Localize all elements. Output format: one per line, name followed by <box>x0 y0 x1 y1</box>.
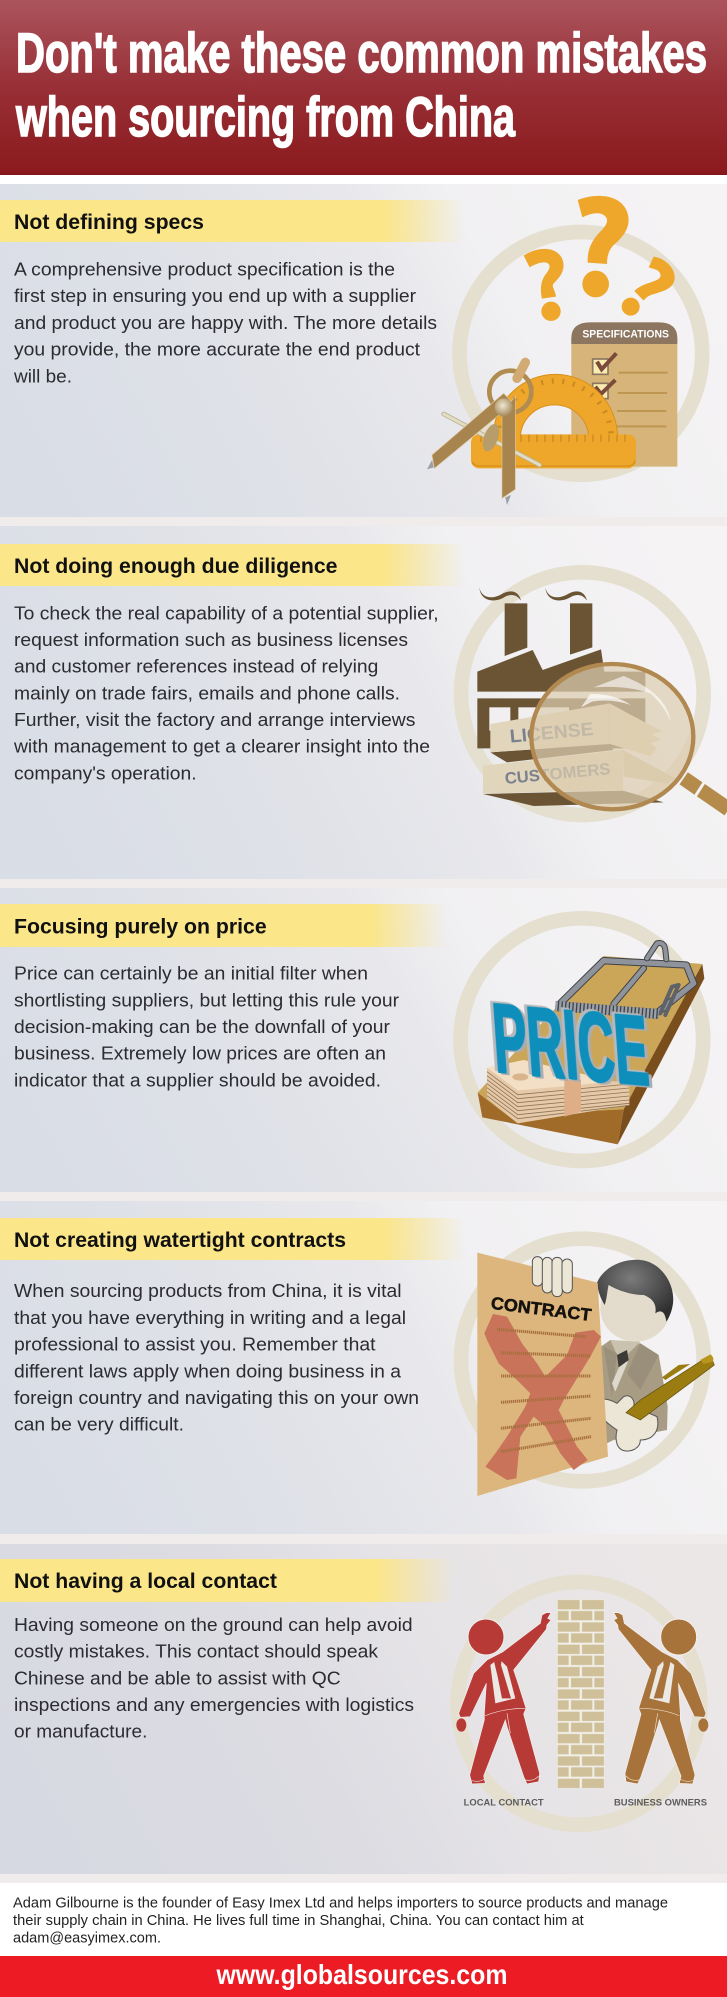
body text: foreign country and navigating this on your own <box>14 1387 419 1408</box>
body text: or manufacture. <box>14 1721 147 1742</box>
body text: professional to assist you. Remember that <box>14 1334 376 1355</box>
icon: two figures separated by a brick wall <box>456 1582 708 1825</box>
icon: man holding marked contract and pen <box>461 1239 714 1496</box>
icon: businessman <box>595 1260 673 1451</box>
panel: focusing purely on price <box>0 888 727 1192</box>
body text: A comprehensive product specification is the <box>14 258 395 280</box>
body text: Further, visit the factory and arrange interviews <box>14 709 415 730</box>
icon: brick wall <box>557 1599 605 1788</box>
label: LOCAL CONTACT <box>464 1797 544 1807</box>
body text: can be very difficult. <box>14 1414 184 1435</box>
body text: When sourcing products from China, it is vital <box>14 1280 401 1301</box>
header banner <box>0 0 727 175</box>
icon: magnifying glass <box>531 664 727 809</box>
body text: you provide, the more accurate the end product <box>14 339 420 360</box>
icon: fingers holding contract <box>532 1257 572 1297</box>
icon: mousetrap spring wire <box>555 943 694 1015</box>
icon: stack of money <box>487 1060 629 1123</box>
title <box>15 21 707 148</box>
icon: factory, documents and magnifying glass <box>461 572 727 815</box>
icon: mousetrap with money and price <box>460 918 704 1161</box>
icon: pen <box>626 1354 714 1420</box>
body text: Price can certainly be an initial filter when <box>14 962 368 983</box>
body text: indicator that a supplier should be avoided. <box>14 1069 381 1090</box>
icon: contract paper: CONTRACT <box>490 1293 593 1325</box>
footer url bar <box>0 1956 727 1997</box>
body text: and customer references instead of relying <box>14 656 378 677</box>
panel: not doing enough due diligence <box>0 526 727 879</box>
body text: will be. <box>13 365 72 386</box>
author note <box>0 1883 727 1956</box>
heading bar <box>0 200 464 242</box>
icon: specifications sheet <box>571 322 677 467</box>
heading: Not doing enough due diligence <box>14 554 338 578</box>
heading bar <box>0 1559 454 1602</box>
body text: mainly on trade fairs, emails and phone calls. <box>14 682 400 703</box>
icon: question marks <box>524 196 675 321</box>
body text: and product you are happy with. The more details <box>14 312 437 333</box>
title: when sourcing from China <box>15 85 516 148</box>
body text: different laws apply when doing business in a <box>14 1360 402 1381</box>
icon: factory <box>477 587 645 748</box>
author note: Adam Gilbourne is the founder of Easy Imex Ltd and helps importers to source products and manage <box>13 1895 668 1911</box>
icon: customers box: CUSTOMERS <box>504 760 611 788</box>
body text: decision-making can be the downfall of your <box>14 1016 390 1037</box>
icon: protractor <box>471 374 636 468</box>
author note: adam@easyimex.com. <box>13 1931 161 1947</box>
body text: business. Extremely low prices are often an <box>14 1043 386 1064</box>
body text: request information such as business licenses <box>14 629 408 650</box>
icon: specifications sheet: SPECIFICATIONS <box>582 329 669 341</box>
body text: Having someone on the ground can help avoid <box>14 1614 413 1635</box>
icon: local contact figure <box>456 1613 551 1807</box>
panel: not creating watertight contracts <box>0 1201 727 1534</box>
icon: business owners figure <box>614 1613 708 1807</box>
footer url bar: www.globalsources.com <box>216 1959 508 1990</box>
body text: shortlisting suppliers, but letting this rule your <box>14 989 399 1010</box>
body text: that you have everything in writing and a legal <box>14 1307 406 1328</box>
heading: Not defining specs <box>14 210 204 234</box>
panel: not having a local contact <box>0 1544 727 1874</box>
heading bar <box>0 544 464 586</box>
heading bar <box>0 1218 464 1260</box>
body text <box>13 258 437 386</box>
panel: not defining specs <box>0 184 727 517</box>
body text: first step in ensuring you end up with a supplier <box>14 285 416 306</box>
icon: license box: LICENSE <box>509 718 594 747</box>
body text: with management to get a clearer insight into the <box>13 736 430 757</box>
body text: Chinese and be able to assist with QC <box>14 1667 341 1688</box>
heading: Not having a local contact <box>14 1569 277 1593</box>
icon: question marks, specifications sheet, protractor and compass <box>427 196 702 505</box>
author note: their supply chain in China. He lives full time in Shanghai, China. You can contact him at <box>13 1913 584 1929</box>
body text <box>14 1614 414 1742</box>
icon: mousetrap base <box>478 956 704 1144</box>
body text <box>14 1280 419 1435</box>
body text: company's operation. <box>14 762 197 783</box>
icon: license box <box>490 703 662 762</box>
heading: Not creating watertight contracts <box>14 1228 346 1252</box>
icon: compass <box>427 362 540 505</box>
body text: inspections and any emergencies with logistics <box>14 1694 414 1715</box>
body text: To check the real capability of a potential supplier, <box>14 602 439 623</box>
icon: customers box <box>483 750 675 806</box>
heading: Focusing purely on price <box>14 914 267 938</box>
body text <box>13 602 439 783</box>
body text <box>14 962 399 1090</box>
label: BUSINESS OWNERS <box>614 1797 707 1807</box>
heading bar <box>0 904 447 947</box>
body text: costly mistakes. This contact should speak <box>14 1641 379 1662</box>
icon: contract paper <box>477 1253 608 1496</box>
